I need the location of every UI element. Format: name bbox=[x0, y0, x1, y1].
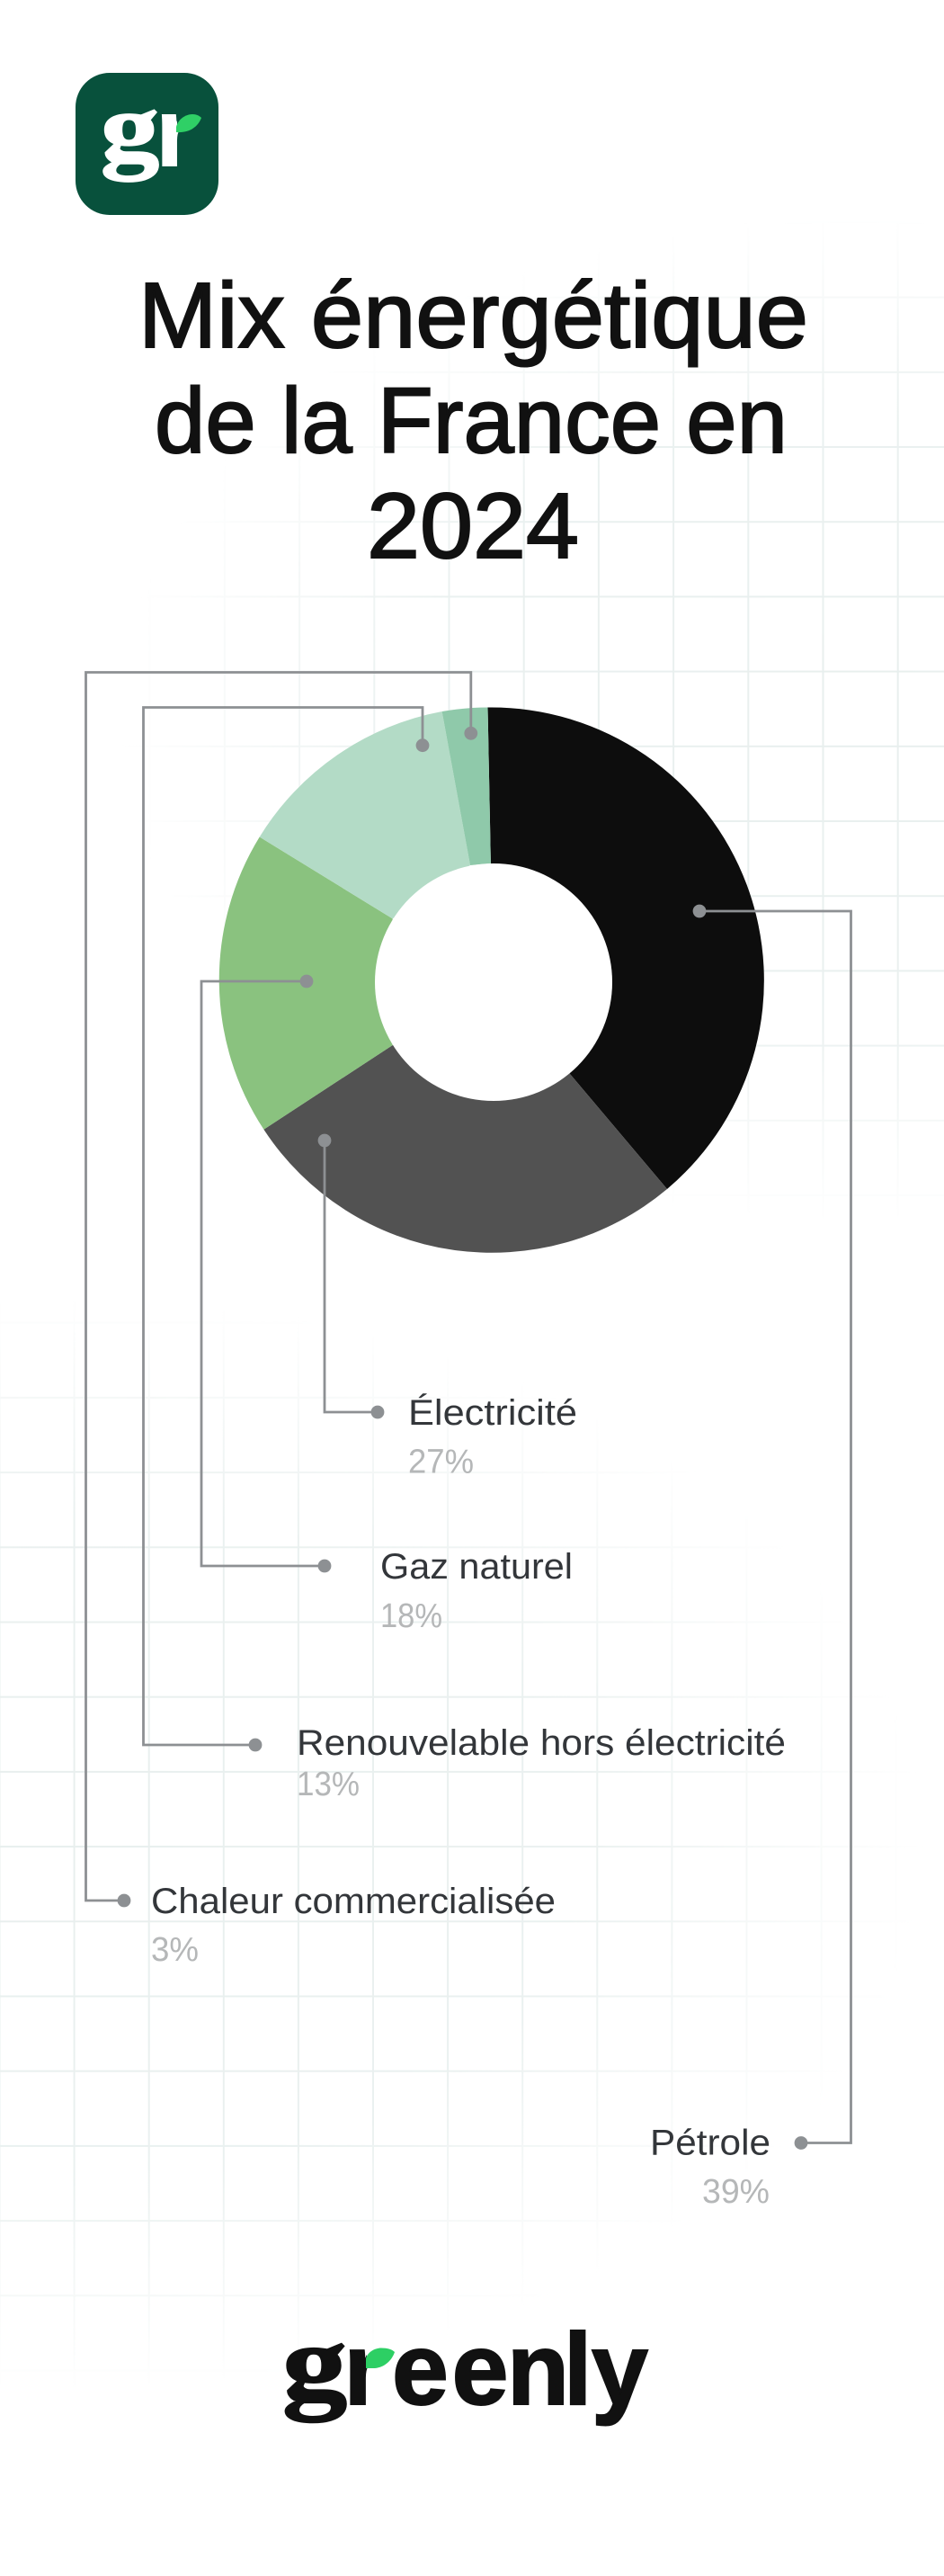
wordmark: greenly logo: e bbox=[392, 2312, 449, 2426]
label: Électricité 27%: 27% bbox=[408, 1443, 474, 1480]
slice: Gaz naturel 18% bbox=[219, 836, 393, 1130]
label: Renouvelable hors électricité 13%: Renouvelable hors électricité bbox=[297, 1723, 786, 1763]
wordmark: greenly logo: l bbox=[564, 2312, 592, 2426]
connector: Gaz naturel bbox=[201, 975, 331, 1572]
slice: Renouvelable hors électricité 13% bbox=[260, 711, 470, 918]
donut hole bbox=[375, 863, 612, 1101]
label: Pétrole 39%: Pétrole bbox=[650, 2123, 770, 2162]
title bbox=[138, 264, 808, 577]
label: Pétrole 39%: 39% bbox=[702, 2173, 770, 2211]
slice: Électricité 27% bbox=[263, 1045, 667, 1253]
connector: Électricité bbox=[318, 1134, 384, 1418]
connector: Chaleur commercialisée bbox=[86, 673, 477, 1907]
label: Chaleur commercialisée 3%: 3% bbox=[151, 1931, 199, 1969]
wordmark: greenly logo: e bbox=[452, 2312, 508, 2426]
donut chart bbox=[219, 707, 764, 1253]
label: Renouvelable hors électricité 13% bbox=[297, 1723, 786, 1803]
wordmark: greenly logo: g bbox=[282, 2303, 347, 2422]
icon: greenly app logo: r bbox=[156, 80, 193, 186]
title: de la France en bbox=[155, 369, 788, 472]
wordmark: greenly logo bbox=[282, 2303, 648, 2426]
wordmark: greenly logo: n bbox=[507, 2312, 569, 2426]
label: Électricité 27% bbox=[408, 1392, 577, 1480]
slice: Chaleur commercialisée 3% bbox=[442, 707, 491, 865]
icon: greenly app logo: g bbox=[101, 75, 159, 182]
title: Mix énergétique bbox=[138, 264, 808, 367]
label: Gaz naturel 18%: 18% bbox=[380, 1597, 442, 1635]
icon: greenly app logo bbox=[76, 73, 218, 215]
label: Pétrole 39% bbox=[650, 2123, 770, 2211]
slice: Pétrole 39% bbox=[487, 707, 764, 1189]
label: Gaz naturel 18% bbox=[380, 1547, 573, 1635]
title: 2024 bbox=[367, 474, 579, 577]
wordmark: greenly logo: r bbox=[343, 2312, 383, 2426]
label: Chaleur commercialisée 3% bbox=[151, 1882, 556, 1969]
wordmark: greenly logo: y bbox=[592, 2312, 648, 2426]
label: Chaleur commercialisée 3%: Chaleur commercialisée bbox=[151, 1882, 556, 1921]
label: Gaz naturel 18%: Gaz naturel bbox=[380, 1547, 573, 1587]
connector: Pétrole bbox=[693, 905, 850, 2150]
label: Renouvelable hors électricité 13%: 13% bbox=[297, 1766, 360, 1803]
connector: Renouvelable hors électricité bbox=[144, 707, 429, 1751]
label: Électricité 27%: Électricité bbox=[408, 1392, 577, 1433]
